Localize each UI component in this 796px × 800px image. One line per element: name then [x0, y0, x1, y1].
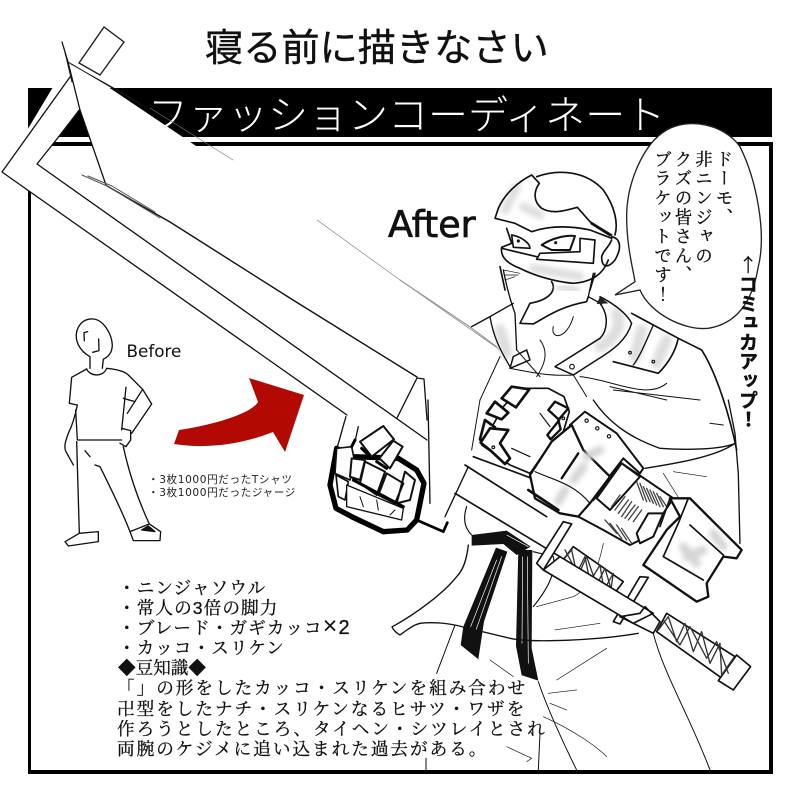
after item list: 「」の形をしたカッコ・スリケンを組み合わせ	[117, 678, 527, 698]
ninja figure	[330, 172, 751, 770]
before item list: ・3枚1000円だったジャージ	[148, 486, 296, 498]
before item list: ・3枚1000円だったTシャツ	[148, 474, 293, 486]
gauntlet arm	[480, 387, 742, 602]
speech bubble text: クズの皆さん、	[671, 150, 696, 285]
before item list	[148, 474, 296, 498]
after item list	[117, 578, 547, 759]
sword lower and guards	[392, 400, 740, 770]
figure body and shoulder	[472, 270, 737, 450]
red arrow	[174, 378, 304, 452]
before figure	[65, 319, 161, 546]
speech bubble	[615, 124, 761, 329]
speech bubble text: ブラケットです！	[650, 150, 676, 304]
speech bubble text: ドーモ、	[712, 150, 737, 227]
title: 寝る前に描きなさい	[205, 18, 549, 73]
header bar	[28, 88, 772, 137]
comic frame	[28, 142, 773, 774]
after item list: ・カッコ・スリケン	[118, 638, 285, 658]
speech bubble text	[650, 150, 737, 304]
after item list: ・ニンジャソウル	[118, 578, 266, 598]
after item list: ・ブレード・ガギカッコ×2	[118, 612, 351, 640]
sword blade	[2, 27, 500, 440]
vertical side caption: ← コミュカアップ！	[735, 255, 762, 429]
katana handle	[537, 522, 751, 690]
speech bubble text: 非ニンジャの	[692, 150, 716, 266]
label: after: After	[388, 203, 476, 246]
after item list: ・常人の3倍の脚力	[118, 598, 278, 618]
label: before: Before	[126, 341, 181, 361]
after item list: ◆豆知識◆	[118, 658, 206, 678]
scarf tail	[520, 282, 588, 324]
fist and hilt	[330, 417, 447, 532]
obi	[461, 531, 531, 659]
after item list: 両腕のケジメに追い込まれた過去がある。	[117, 739, 488, 759]
after item list: 作ろうとしたところ、タイヘン・シツレイとされ	[117, 719, 547, 739]
after item list: 卍型をしたナチ・スリケンなるヒサツ・ワザを	[117, 699, 526, 719]
head and mask	[495, 172, 620, 290]
